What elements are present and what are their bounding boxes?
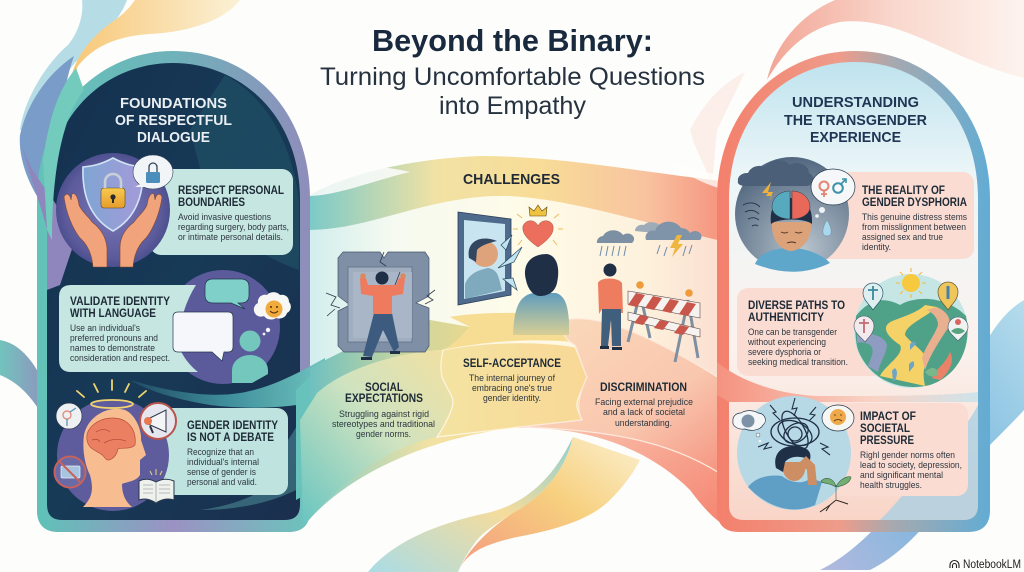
text: self-acceptance: embracing one's true <box>472 383 552 394</box>
text: discrimination: Facing external prejudice <box>595 397 693 408</box>
ground: three journey regions <box>300 313 730 527</box>
icon: winding paths landscape <box>854 268 968 388</box>
icon: distressed person with storm and brain <box>735 157 855 272</box>
text: self-acceptance: SELF-ACCEPTANCE <box>463 358 561 370</box>
card: the reality of gender dysphoria: This genuine distress stems <box>862 212 967 223</box>
card: impact of societal pressure: Righl gender norms often <box>860 450 955 461</box>
icon: hands with shield and lock <box>56 153 173 267</box>
panel: challenges <box>300 171 730 527</box>
card: diverse paths to authenticity <box>737 288 897 376</box>
text: discrimination: and a lack of societal <box>603 407 685 418</box>
card: validate identity: preferred pronouns and <box>70 333 158 344</box>
heading: UNDERSTANDING <box>792 94 919 111</box>
card: the reality of gender dysphoria: identity. <box>862 242 891 253</box>
card: validate identity: VALIDATE IDENTITY <box>70 296 170 308</box>
heading: OF RESPECTFUL <box>115 112 232 129</box>
icon: overwhelmed person with tangled thoughts <box>733 396 854 512</box>
panel: foundations of respectful dialogue <box>20 51 325 532</box>
card: validate identity: consideration and respect. <box>70 353 170 364</box>
illustration: person pushing against a wall <box>326 252 435 360</box>
text: discrimination: DISCRIMINATION <box>600 382 687 394</box>
card: respect personal boundaries: or intimate personal details. <box>178 232 283 243</box>
card: respect personal boundaries: BOUNDARIES <box>178 197 245 209</box>
pale centre <box>310 196 730 400</box>
card: diverse paths to authenticity: AUTHENTICITY <box>748 312 824 324</box>
card: respect personal boundaries: Avoid invasive questions <box>178 212 271 223</box>
panel frame <box>717 51 990 532</box>
card: gender identity is not a debate: personal and valid. <box>187 477 257 488</box>
heading: EXPERIENCE <box>810 129 901 146</box>
card: diverse paths to authenticity: One can be transgender <box>748 327 838 338</box>
heading: DIALOGUE <box>137 129 210 146</box>
illustration: person before barricade under storm clouds <box>597 222 702 362</box>
card: gender identity is not a debate: sense of gender is <box>187 467 256 478</box>
card: the reality of gender dysphoria: GENDER DYSPHORIA <box>862 197 967 209</box>
card: gender identity is not a debate: IS NOT A DEBATE <box>187 432 274 444</box>
card: validate identity: Use an individual's <box>70 323 140 334</box>
panel: understanding the transgender experience <box>717 51 990 532</box>
card: gender identity is not a debate <box>150 408 288 495</box>
panel interior <box>47 63 300 520</box>
card: gender identity is not a debate: individual's internal <box>187 457 259 468</box>
card: the reality of gender dysphoria: THE REALITY OF <box>862 185 945 197</box>
card: impact of societal pressure: lead to society, depression, <box>860 460 962 471</box>
title: Turning Uncomfortable Questions <box>320 63 705 91</box>
upper wave band <box>310 156 730 243</box>
panel interior <box>729 62 978 520</box>
text: social expectations: SOCIAL <box>365 382 403 394</box>
text: self-acceptance <box>463 358 561 404</box>
icon: head with brain, halo and symbols <box>54 380 176 511</box>
card: validate identity: WITH LANGUAGE <box>70 308 156 320</box>
card: diverse paths to authenticity: severe dysphoria or <box>748 347 822 358</box>
title: into Empathy <box>439 92 586 120</box>
card: impact of societal pressure <box>830 403 968 496</box>
card: diverse paths to authenticity: DIVERSE PATHS TO <box>748 300 845 312</box>
card: respect personal boundaries <box>150 169 293 255</box>
card: impact of societal pressure: and significant mental <box>860 470 943 481</box>
text: self-acceptance: gender identity. <box>483 393 541 404</box>
text: social expectations <box>332 382 435 440</box>
heading <box>784 94 927 146</box>
card: impact of societal pressure: health struggles. <box>860 480 922 491</box>
title <box>320 23 705 120</box>
heading: FOUNDATIONS <box>120 95 227 112</box>
text: social expectations: stereotypes and traditional <box>332 419 435 430</box>
card: validate identity <box>59 270 280 384</box>
illustration: person facing mirror with heart and crown <box>458 205 569 335</box>
text: social expectations: Struggling against rigid <box>339 409 429 420</box>
card: the reality of gender dysphoria: assigned sex and true <box>862 232 943 243</box>
card: the reality of gender dysphoria <box>810 172 974 259</box>
card: gender identity is not a debate: GENDER IDENTITY <box>187 420 278 432</box>
text: social expectations: EXPECTATIONS <box>345 393 423 405</box>
card: diverse paths to authenticity: without experiencing <box>747 337 826 348</box>
lower wave band <box>300 390 730 527</box>
text: discrimination: understanding. <box>615 418 672 429</box>
icon: speech bubbles and person <box>173 279 291 383</box>
card: validate identity: names to demonstrate <box>70 343 155 354</box>
heading <box>115 95 232 146</box>
heading: THE TRANSGENDER <box>784 112 927 129</box>
heading: challenges: CHALLENGES <box>463 171 560 188</box>
text: self-acceptance: The internal journey of <box>469 373 555 384</box>
card: the reality of gender dysphoria: from misslignment between <box>862 222 966 233</box>
card: gender identity is not a debate: Recognize that an <box>187 447 254 458</box>
card: diverse paths to authenticity: seeking medical transition. <box>748 357 848 368</box>
card: impact of societal pressure: SOCIETAL <box>860 423 910 435</box>
text: social expectations: gender norms. <box>356 429 411 440</box>
card: respect personal boundaries: RESPECT PERSONAL <box>178 185 284 197</box>
panel frame <box>37 51 310 532</box>
card: impact of societal pressure: PRESSURE <box>860 435 914 447</box>
text: discrimination <box>595 382 693 429</box>
card: respect personal boundaries: regarding surgery, body parts, <box>178 222 289 233</box>
title: Beyond the Binary: <box>372 23 653 58</box>
card: impact of societal pressure: IMPACT OF <box>860 411 916 423</box>
